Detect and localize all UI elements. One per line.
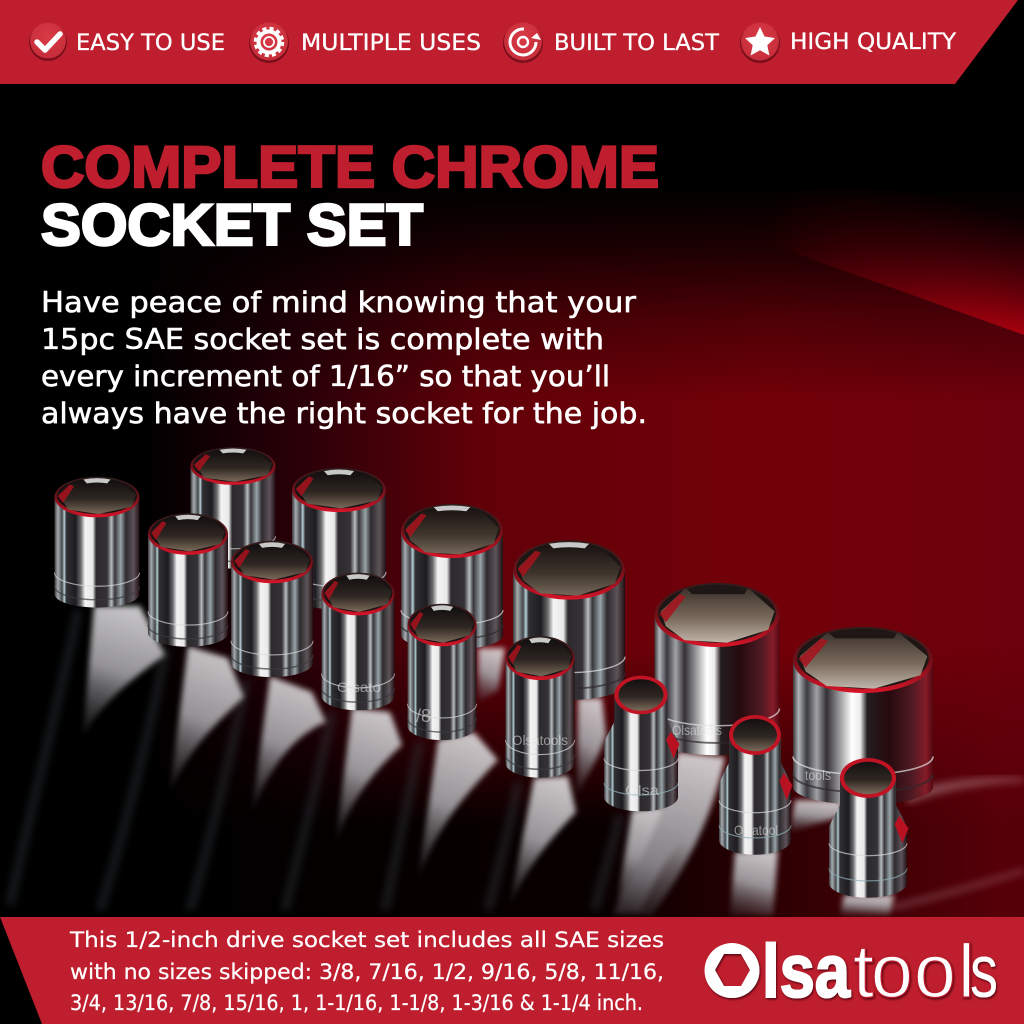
logo: Olsatools: lsa <box>762 929 851 1013</box>
logo: Olsatools: tool <box>853 929 975 1013</box>
description text: always have the right socket for the job. <box>41 397 647 430</box>
size list text <box>69 928 664 1016</box>
label: high quality: HIGH QUALITY <box>790 30 957 55</box>
photo background: red and black metal surface <box>174 193 1024 917</box>
description text <box>41 286 647 430</box>
size list text: This 1/2-inch drive socket set includes all SAE sizes <box>69 928 664 953</box>
top banner <box>0 0 1018 84</box>
icon: star <box>740 22 780 63</box>
description text: every increment of 1/16” so that you’ll <box>41 360 610 393</box>
socket engravings: /8 <box>416 706 431 726</box>
icon: check <box>29 22 67 61</box>
label: built to last: BUILT TO LAST <box>554 31 720 56</box>
socket engravings <box>337 679 831 838</box>
description text: Have peace of mind knowing that your <box>41 286 636 319</box>
chrome sockets, back row then front row <box>54 447 933 898</box>
socket engravings: Olsa <box>625 782 659 798</box>
title: COMPLETE CHROME <box>41 135 659 200</box>
size list text: 3/4, 13/16, 7/8, 15/16, 1, 1-1/16, 1-1/8, 1-3/16 & 1-1/4 inch. <box>70 991 643 1016</box>
floor reflections of the sockets <box>10 606 1024 915</box>
label: easy to use: EASY TO USE <box>76 31 225 56</box>
description text: 15pc SAE socket set is complete with <box>41 323 604 356</box>
logo: Olsatools <box>705 929 998 1013</box>
title <box>41 135 659 258</box>
title: SOCKET SET <box>41 193 423 258</box>
logo: Olsatools: s <box>970 929 998 1013</box>
icon: gear <box>249 22 289 63</box>
socket engravings: Olsatools <box>512 732 568 748</box>
label: multiple uses: MULTIPLE USES <box>301 31 481 56</box>
icon: rotating gear <box>503 22 543 63</box>
socket engravings: Olsatool <box>734 822 778 838</box>
socket engravings: Olsatools <box>672 722 722 738</box>
socket engravings: tools <box>805 767 831 783</box>
bottom banner <box>0 917 1024 1024</box>
socket engravings: Olsato <box>337 679 381 695</box>
size list text: with no sizes skipped: 3/8, 7/16, 1/2, 9/16, 5/8, 11/16, <box>70 960 664 985</box>
